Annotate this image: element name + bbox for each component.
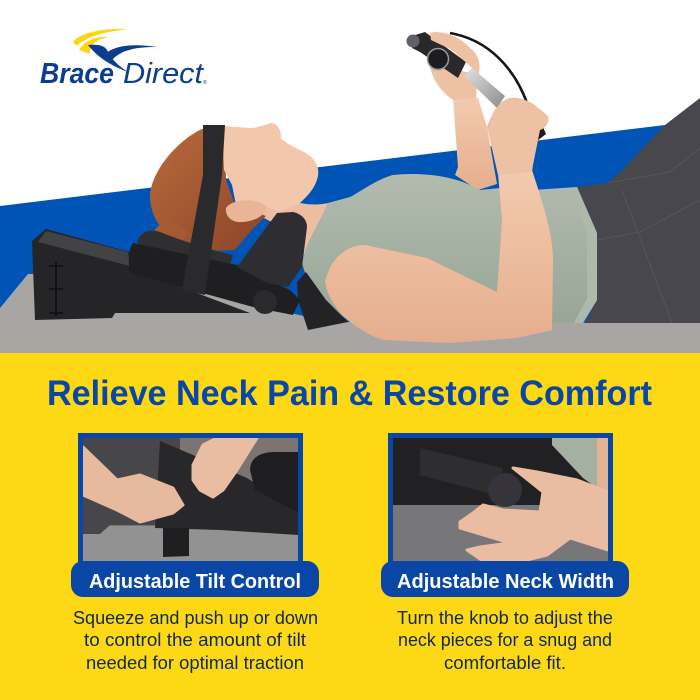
photo frame — [388, 433, 613, 563]
shirt — [302, 174, 597, 323]
ear — [226, 200, 266, 222]
pill label — [381, 561, 629, 597]
text block: tilt description: to control the amount of tilt — [84, 630, 306, 650]
yellow lower panel — [0, 353, 700, 700]
end support — [297, 272, 348, 330]
label text: Adjustable Tilt Control — [89, 570, 301, 593]
lower hand — [487, 98, 549, 175]
tilt slot — [49, 262, 63, 316]
pump handle end — [515, 118, 546, 141]
heading: Relieve Neck Pain & Restore Comfort — [47, 374, 652, 413]
face — [222, 123, 318, 212]
knob — [253, 290, 277, 314]
pump hose — [450, 33, 527, 103]
panel: tilt control — [71, 433, 319, 597]
text block: neck width description: neck pieces for a snug and — [398, 630, 612, 650]
text block: neck width description — [397, 608, 613, 673]
logo wordmark: Brace — [40, 58, 114, 90]
head pad — [137, 230, 233, 266]
photo frame — [78, 433, 303, 563]
logo swooshes — [73, 29, 157, 72]
pump silver barrel — [464, 68, 505, 108]
device base wedge — [32, 229, 250, 320]
leggings — [577, 98, 700, 323]
neck pad — [237, 212, 307, 287]
upper hand fingers — [430, 32, 480, 74]
back forearm — [453, 98, 497, 190]
logo: Brace Direct — [40, 29, 207, 90]
hair — [150, 129, 266, 252]
pump valve — [406, 34, 420, 48]
label text: Adjustable Neck Width — [397, 570, 614, 593]
hair bun — [154, 223, 186, 243]
leggings seams — [597, 148, 700, 323]
panel: neck width — [381, 433, 629, 597]
text block: tilt description: Squeeze and push up or down — [73, 608, 318, 628]
neck — [240, 195, 328, 262]
logo: Brace Direct: Direct — [123, 58, 205, 90]
grey exercise mat — [0, 274, 700, 353]
text block: neck width description: comfortable fit. — [444, 653, 566, 673]
device rail — [38, 231, 130, 266]
photo: hand turning knob — [393, 438, 608, 561]
device head cradle arm — [129, 243, 300, 315]
pump head — [412, 32, 466, 78]
photo: woman lying on neck traction device — [32, 32, 700, 343]
head strap — [182, 125, 225, 295]
shirt hem band — [572, 187, 597, 323]
text block: neck width description: Turn the knob to adjust the — [397, 608, 613, 628]
pressure gauge — [428, 48, 448, 70]
photo: hands adjusting tilt — [83, 438, 298, 561]
logo: Brace Direct: ® — [203, 79, 207, 86]
text block: tilt description: needed for optimal traction — [86, 653, 304, 673]
pill label — [71, 561, 319, 597]
raised upper arm — [325, 170, 553, 343]
palm of upper hand — [428, 58, 478, 100]
text block: tilt description — [73, 608, 318, 673]
blue diagonal band — [0, 125, 665, 330]
